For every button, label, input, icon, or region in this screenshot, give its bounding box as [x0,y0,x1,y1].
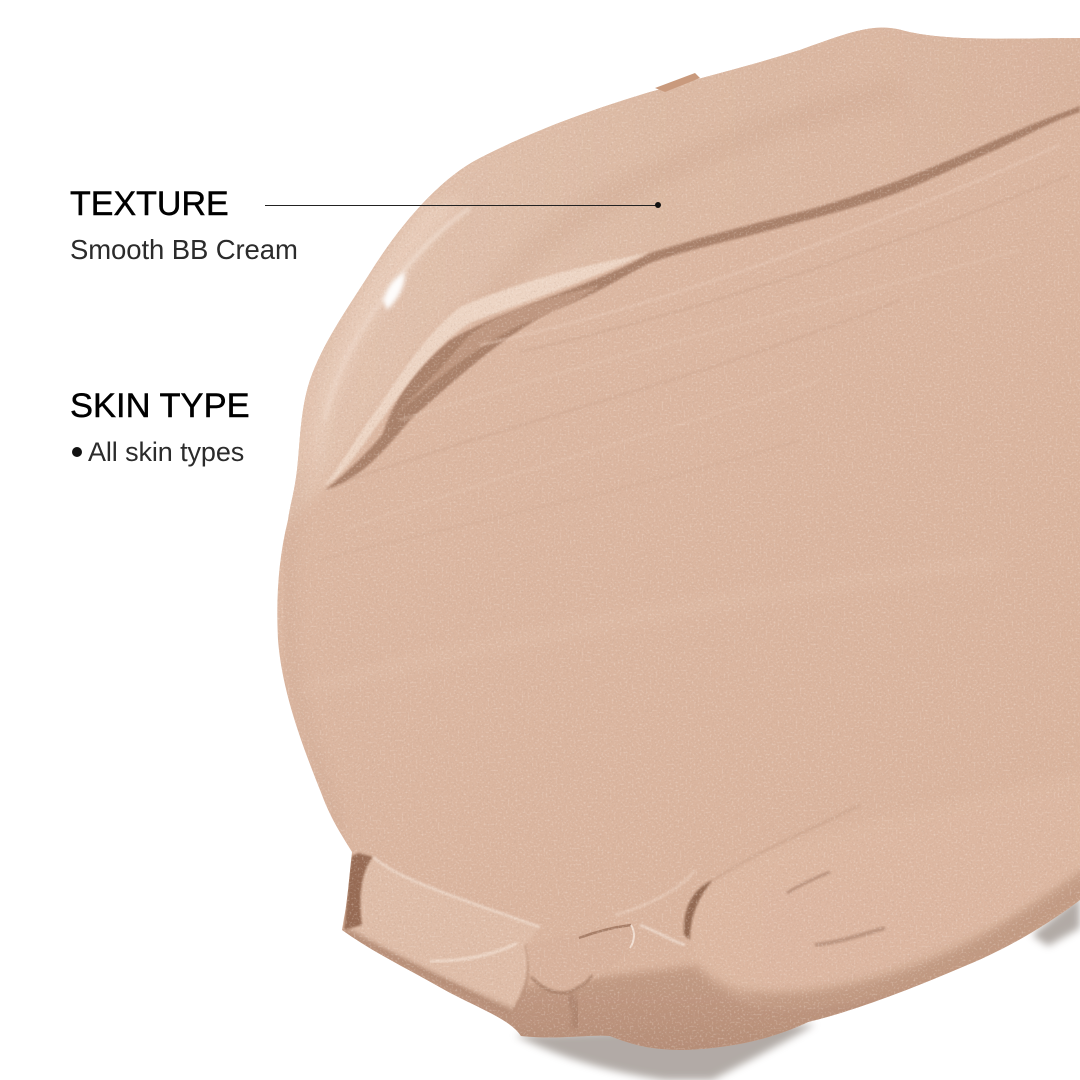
callout line pointing to the cream [265,202,661,208]
lower underside shading [344,900,1080,1050]
left rim highlight [322,202,454,424]
left rim shade [289,470,340,830]
gloss highlight [325,208,470,420]
shading in top band [480,90,900,320]
wet highlights along lower edge [640,925,685,945]
heading: texture: TEXTURE [70,185,229,223]
drop shadow under swatch [515,895,1080,1080]
bottom left flap [344,853,540,1012]
soft streaks in body [400,145,1059,422]
lower lobe [682,806,1080,1002]
bullet item: all skin types: All skin types [88,437,244,467]
crease light lip [323,253,647,487]
cream body [277,28,1080,1050]
small peak at top edge [655,73,700,92]
cream swatch illustration [277,28,1080,1080]
small pocket fold [526,925,634,1028]
crease inner fill [406,286,598,406]
grain texture [280,29,1080,997]
text: texture value: Smooth BB Cream [70,234,298,265]
fold crease shadow [325,106,1080,490]
upper fold band [280,20,1080,530]
heading: skin type: SKIN TYPE [70,387,250,425]
